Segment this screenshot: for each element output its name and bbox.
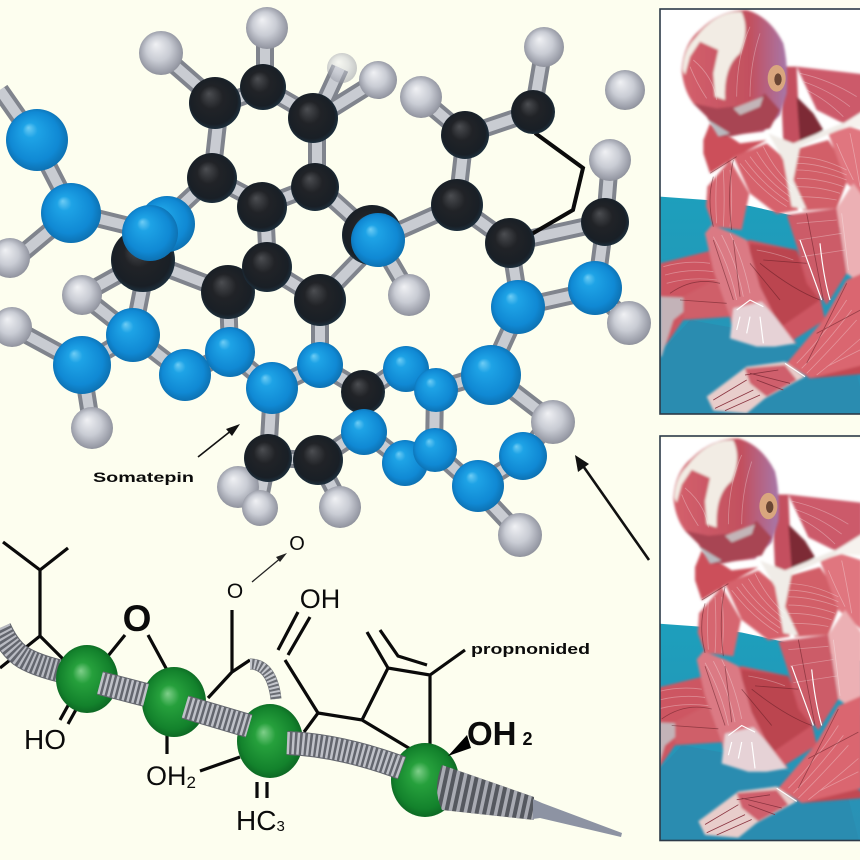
large O label: O [123,598,151,639]
structural formula lines [0,542,465,798]
OH2 label: 2 [186,773,196,792]
grey hydrogen atoms [0,7,651,557]
label: propnonided: propnonided [471,641,590,658]
green atoms [56,645,459,817]
black carbon atoms [111,64,629,485]
molecule: ball and stick model [0,7,651,557]
needle [533,799,622,837]
label: Somatepin: Somatepin [93,469,194,485]
HC3 label: HC [236,805,276,836]
coil segments in front of atoms [100,683,402,768]
O label: O [227,580,243,603]
chemical chain diagram [0,533,622,837]
double bond lines on right ring [530,133,583,235]
top O label: O [289,533,305,555]
HO label: HO [24,724,66,755]
panel: top muscle figure [660,9,860,427]
thin arrow to O [252,553,287,582]
OH2 label: OH [146,761,186,791]
arrow: to Somatepin region [198,424,240,457]
panel: bottom muscle figure [652,436,860,851]
arrow: from lower panel to molecule [575,455,649,560]
coil start and small coil [0,628,276,699]
OH2 bold label: OH 2 [467,715,533,752]
wedge bond [448,735,471,756]
OH label: OH [300,584,340,614]
coil end tapered [437,765,534,820]
HC3 label: 3 [276,818,285,835]
blue nitrogen atoms [6,109,622,512]
molecule bonds [0,27,630,535]
